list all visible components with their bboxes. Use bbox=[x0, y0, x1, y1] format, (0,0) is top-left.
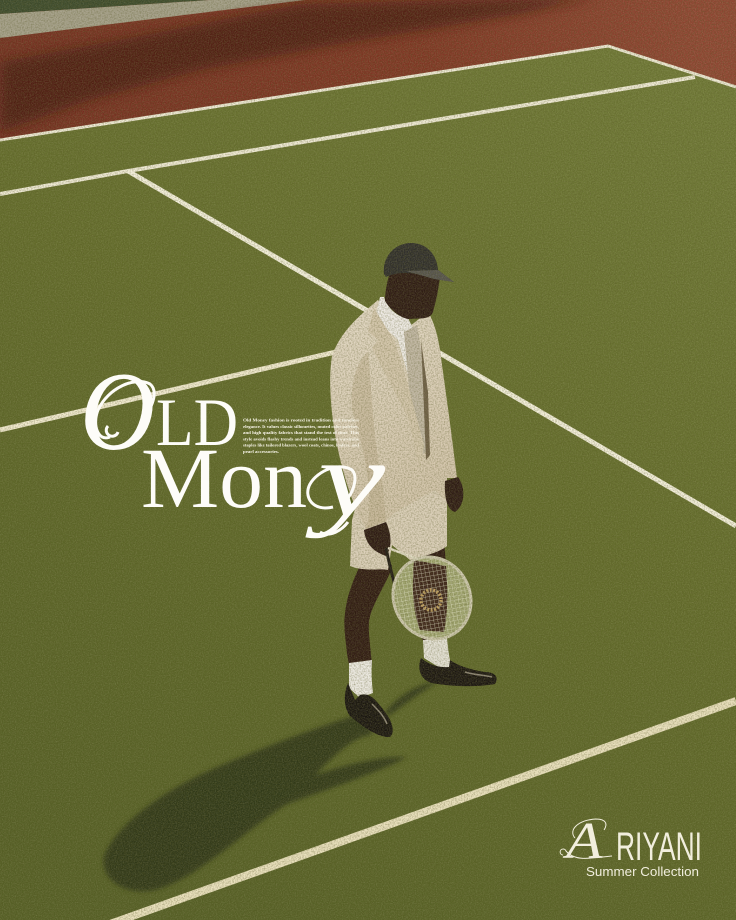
neck and face bbox=[385, 268, 440, 319]
tennis racket bbox=[378, 543, 486, 653]
cap bbox=[384, 243, 454, 282]
brand initial A: A bbox=[562, 813, 603, 870]
O swash bbox=[96, 382, 154, 438]
description text: staples like tailored blazers, wool coats, chinos, loafers, and bbox=[243, 443, 359, 448]
left sock bbox=[349, 660, 373, 698]
title letter O: O bbox=[80, 350, 155, 474]
clay court surround bbox=[0, 0, 736, 150]
title letter y: y bbox=[305, 420, 386, 539]
player figure bbox=[330, 243, 497, 737]
brand logo bbox=[560, 813, 702, 879]
title letters LD: LD bbox=[156, 384, 238, 460]
description text: and high quality fabrics that stand the test of time. This bbox=[243, 430, 359, 435]
description text bbox=[243, 418, 359, 454]
right shoe shine bbox=[465, 672, 492, 677]
right leg bbox=[412, 540, 448, 642]
shirt bbox=[375, 297, 414, 375]
lapel bbox=[368, 308, 424, 470]
cap brim bbox=[406, 270, 454, 282]
left shoe bbox=[345, 683, 393, 737]
description text: elegance. It values classic silhouettes, muted color palettes, bbox=[243, 424, 359, 429]
jacket bbox=[330, 300, 457, 529]
y swash bbox=[308, 467, 355, 534]
right shoe bbox=[419, 658, 497, 686]
player cast shadow bbox=[104, 680, 440, 891]
brand tagline: Summer Collection bbox=[586, 865, 699, 879]
jacket sleeve shadow bbox=[352, 352, 386, 529]
description text: Old Money fashion is rooted in tradition and timeless bbox=[243, 418, 359, 422]
shorts bbox=[350, 470, 447, 570]
right hand bbox=[445, 477, 463, 512]
description text: pearl accessories. bbox=[243, 449, 279, 454]
jacket opening shadow bbox=[421, 340, 430, 460]
tie bbox=[404, 325, 428, 455]
description text: style avoids flashy trends and instead leans into wardrobe bbox=[243, 436, 359, 441]
title letters Mon: Mon bbox=[141, 430, 307, 526]
left shoe shine bbox=[372, 704, 387, 724]
right sock bbox=[423, 638, 452, 668]
left hand bbox=[364, 522, 390, 556]
left leg bbox=[344, 562, 392, 665]
A swash bbox=[560, 819, 612, 858]
title: Old Money bbox=[80, 350, 386, 539]
